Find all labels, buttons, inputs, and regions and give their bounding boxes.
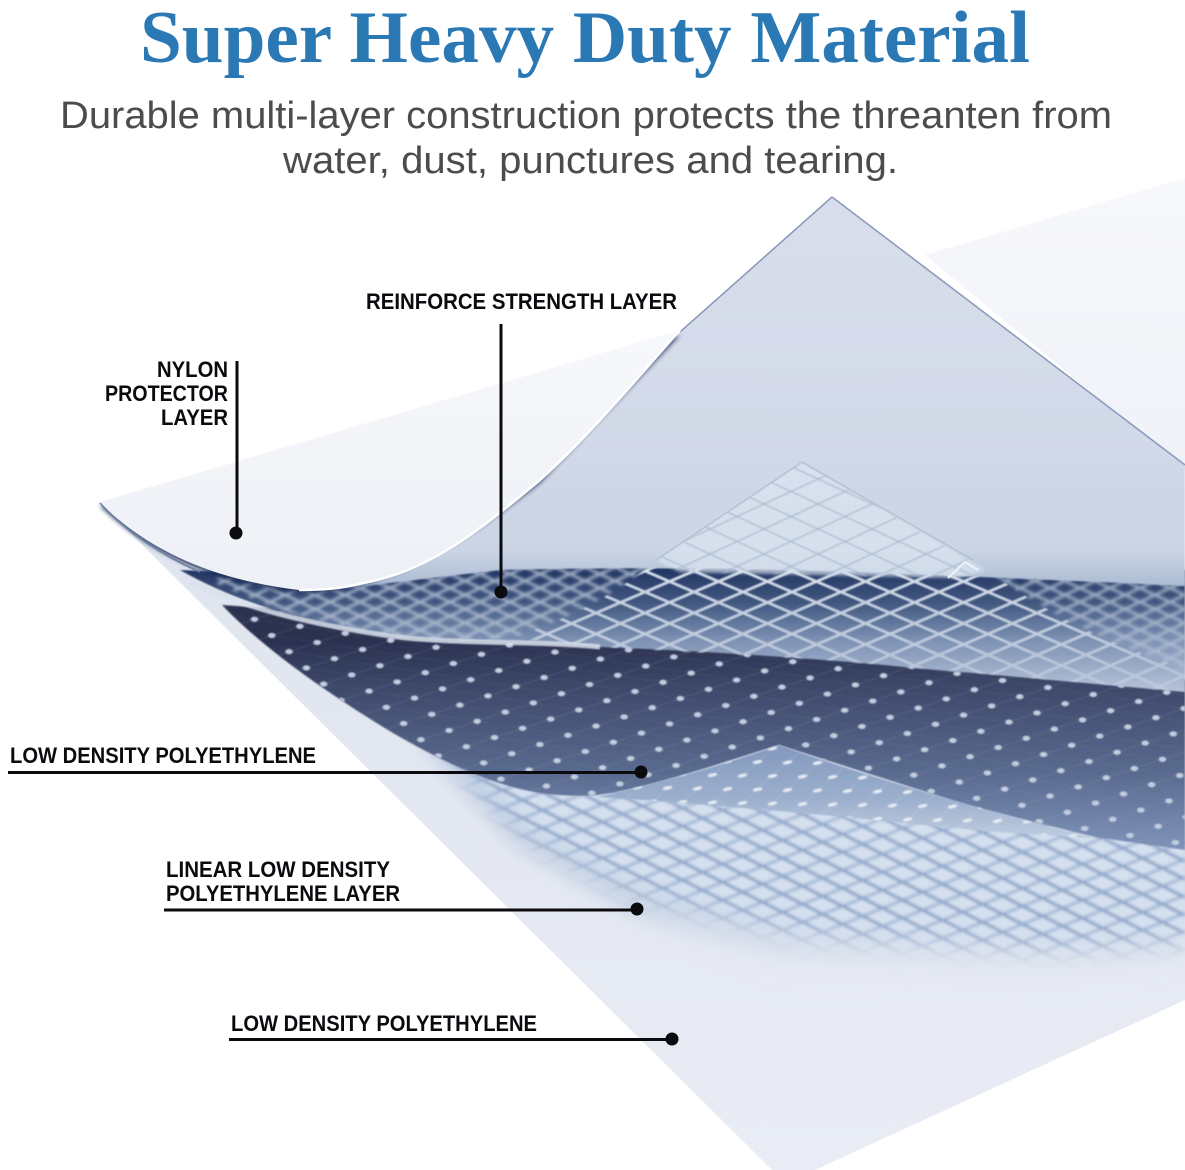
subtitle	[60, 95, 1112, 182]
dark dotted layer	[222, 605, 1185, 850]
lower mesh layer: linear low density polyethylene	[425, 752, 1185, 967]
callout: linear low density polyethylene layer: LINEAR LOW DENSITY	[166, 857, 390, 882]
callout: nylon protector layer: NYLON	[157, 357, 228, 382]
callout: reinforce strength layer	[366, 289, 677, 598]
callout: reinforce strength layer: REINFORCE STRENGTH LAYER	[366, 289, 677, 314]
callout: nylon protector layer	[105, 357, 242, 540]
flap edge highlight	[680, 197, 1185, 465]
bottom sheet: low density polyethylene	[100, 503, 1185, 1170]
subtitle: water, dust, punctures and tearing.	[282, 140, 898, 182]
callout: linear low density polyethylene layer: POLYETHYLENE LAYER	[166, 881, 400, 906]
callout: low density polyethylene lower	[229, 1011, 678, 1046]
callout: nylon protector layer: PROTECTOR	[105, 381, 228, 406]
back sheet far right	[925, 178, 1185, 470]
panel: layered material illustration	[100, 178, 1185, 1170]
white top lobe: nylon protector layer	[100, 330, 680, 593]
reinforce strength mesh band	[180, 560, 1185, 692]
inner raised flap	[330, 197, 1185, 590]
faint mesh showing through the flap	[656, 462, 985, 578]
callout: linear low density polyethylene layer	[164, 857, 644, 916]
subtitle: Durable multi-layer construction protects the threanten from	[60, 95, 1112, 137]
translucent lifted flap with dots	[597, 745, 1095, 838]
callout: low density polyethylene upper: LOW DENSITY POLYETHYLENE	[10, 743, 316, 768]
callout: low density polyethylene upper	[8, 743, 648, 778]
callout: nylon protector layer: LAYER	[161, 405, 228, 430]
callout: low density polyethylene lower: LOW DENSITY POLYETHYLENE	[231, 1011, 537, 1036]
